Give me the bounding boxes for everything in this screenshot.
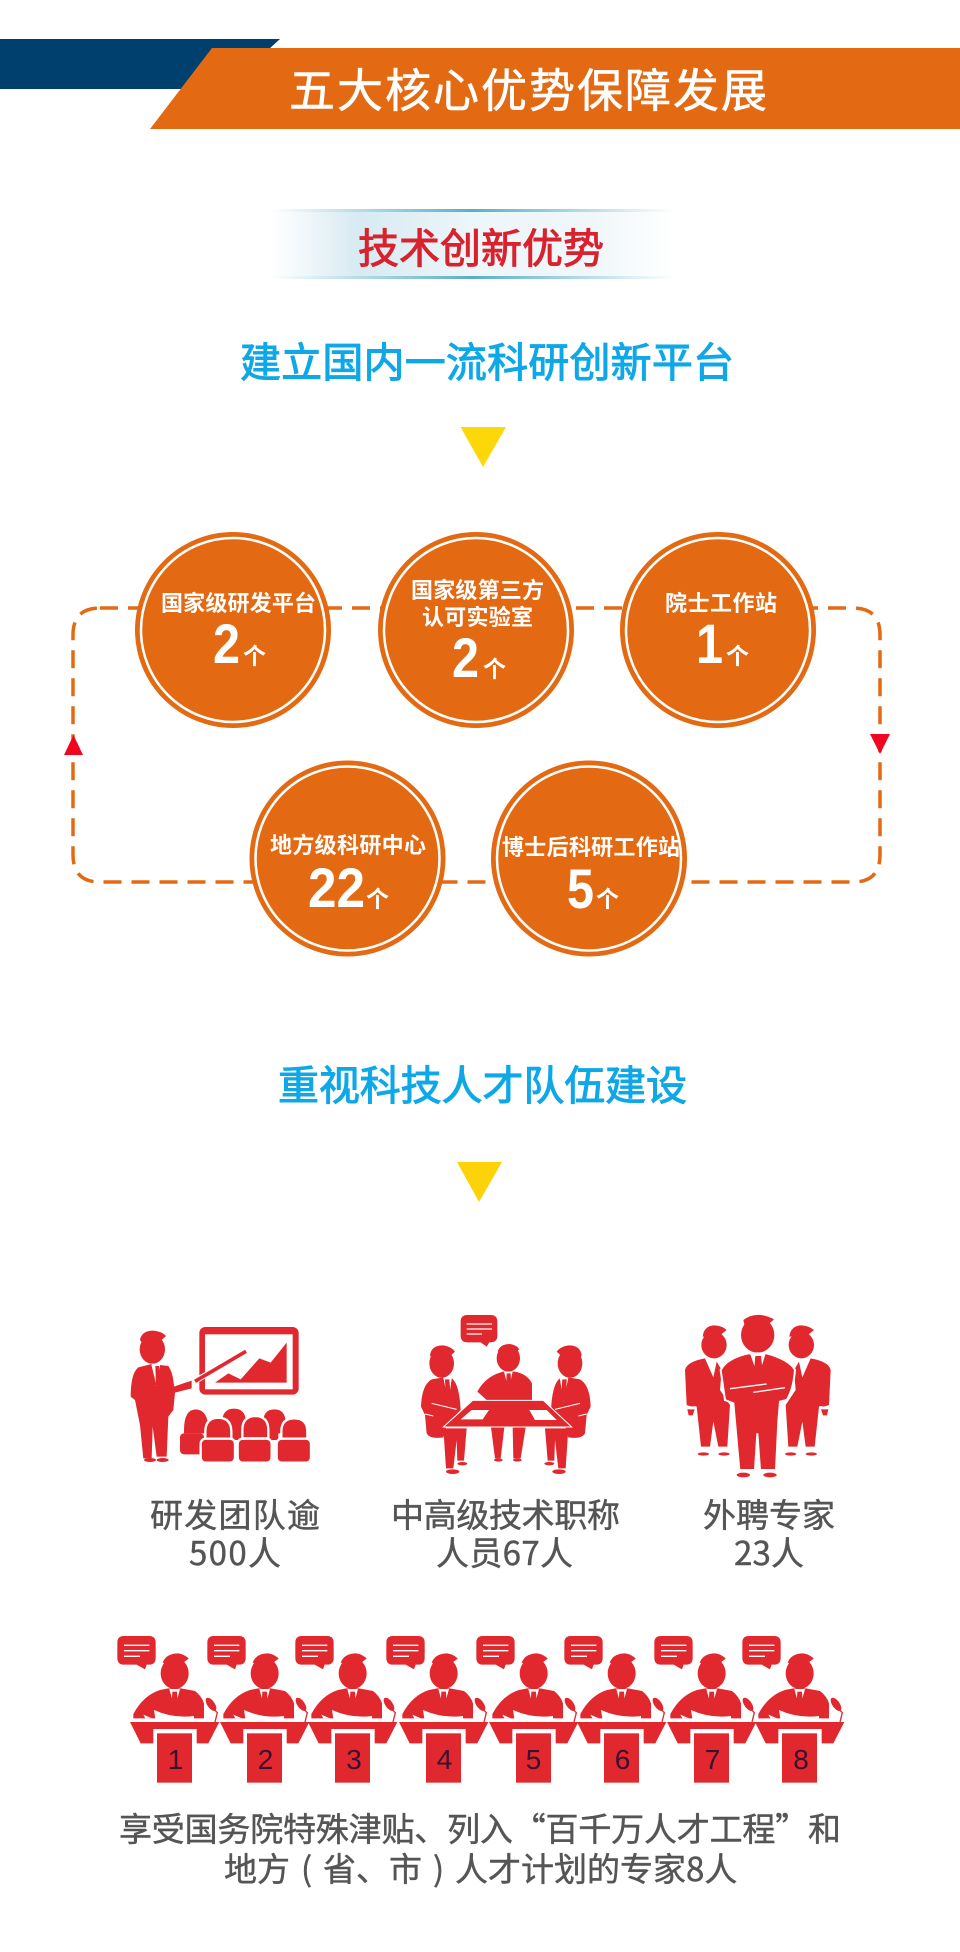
caption: senior technical staff: 人员67人 <box>436 1527 573 1575</box>
banner: navy stripe <box>0 39 280 89</box>
circle: postdoctoral workstations: 5 <box>567 857 594 920</box>
caption: eight government-recognised experts: 享受国务院特殊津贴、列入“百千万人才工程”和 <box>119 1803 841 1851</box>
speaker 4: 4 <box>437 1744 452 1775</box>
circle: local research centers: 个 <box>366 880 389 914</box>
section heading: technology innovation advantage: 技术创新优势 <box>358 215 604 275</box>
icon: meeting around a table with speech bubble <box>421 1315 591 1474</box>
caption: eight government-recognised experts: ( <box>301 1843 312 1891</box>
caption: eight government-recognised experts: 地方 <box>224 1843 290 1891</box>
banner: orange title bar <box>150 48 960 129</box>
circle: academician workstation: 个 <box>726 637 749 671</box>
caption: eight government-recognised experts: 省、 <box>323 1843 389 1891</box>
speaker 8 <box>742 1636 844 1783</box>
caption: senior technical staff <box>391 1489 620 1575</box>
arrow: yellow down triangle 2 <box>457 1162 502 1202</box>
speaker 3 <box>295 1636 397 1783</box>
heading: talent team: 重视科技人才队伍建设 <box>278 1052 687 1112</box>
speaker 3: 3 <box>346 1744 362 1775</box>
speaker 5 <box>476 1636 578 1783</box>
caption: external experts: 外聘专家 <box>703 1489 835 1537</box>
section heading: technology innovation advantage <box>270 209 674 279</box>
circle: national R&D platforms: 个 <box>243 637 266 671</box>
caption: R&D team <box>150 1489 320 1575</box>
speaker 6: 6 <box>615 1744 630 1775</box>
circle: postdoctoral workstations: 个 <box>596 880 619 914</box>
speaker 2: 2 <box>258 1744 273 1775</box>
speaker 7: 7 <box>705 1744 720 1775</box>
speaker 8: 8 <box>793 1744 809 1775</box>
circle: academician workstation: 院士工作站 <box>665 586 777 618</box>
caption: eight government-recognised experts: 市 <box>389 1843 422 1891</box>
caption: R&D team: 500人 <box>189 1527 281 1575</box>
caption: eight government-recognised experts: 人才计划的专家8人 <box>455 1843 737 1891</box>
circle: national R&D platforms: 国家级研发平台 <box>161 586 316 618</box>
arrow: yellow down triangle 1 <box>460 427 506 467</box>
circle: national accredited labs: 认可实验室 <box>422 600 533 632</box>
speaker 1 <box>117 1636 219 1783</box>
speaker 7 <box>654 1636 756 1783</box>
speaker 2 <box>207 1636 309 1783</box>
caption: external experts: 23人 <box>734 1527 804 1575</box>
circle: local research centers: 22 <box>308 856 365 919</box>
circle: national R&D platforms: 2 <box>213 612 240 675</box>
caption: R&D team: 研发团队逾 <box>150 1489 320 1537</box>
caption: eight government-recognised experts <box>119 1803 841 1891</box>
circle: postdoctoral workstations <box>491 760 687 956</box>
speaker 5: 5 <box>526 1744 541 1775</box>
circle: local research centers: 地方级科研中心 <box>270 828 426 860</box>
icon: three experts <box>685 1315 831 1477</box>
title: 五大核心优势保障发展 <box>289 55 767 121</box>
circle: national accredited labs <box>378 532 574 728</box>
circle: academician workstation <box>620 532 816 728</box>
flow loop: dashed line with arrows <box>64 608 890 882</box>
circle: academician workstation: 1 <box>696 612 723 675</box>
circle: national R&D platforms <box>135 532 331 728</box>
speaker 4 <box>386 1636 488 1783</box>
circle: national accredited labs: 个 <box>483 650 506 684</box>
circle: national accredited labs: 国家级第三方 <box>411 573 544 605</box>
circle: postdoctoral workstations: 博士后科研工作站 <box>502 830 680 862</box>
caption: senior technical staff: 中高级技术职称 <box>391 1489 620 1537</box>
circle: national accredited labs: 2 <box>452 626 479 689</box>
speaker 6 <box>564 1636 666 1783</box>
circle: local research centers <box>250 760 446 956</box>
heading: research platform: 建立国内一流科研创新平台 <box>240 329 734 389</box>
icon: presenter with audience <box>131 1327 311 1463</box>
caption: eight government-recognised experts: ) <box>433 1843 444 1891</box>
speaker 1: 1 <box>168 1744 183 1775</box>
caption: external experts <box>703 1489 835 1575</box>
